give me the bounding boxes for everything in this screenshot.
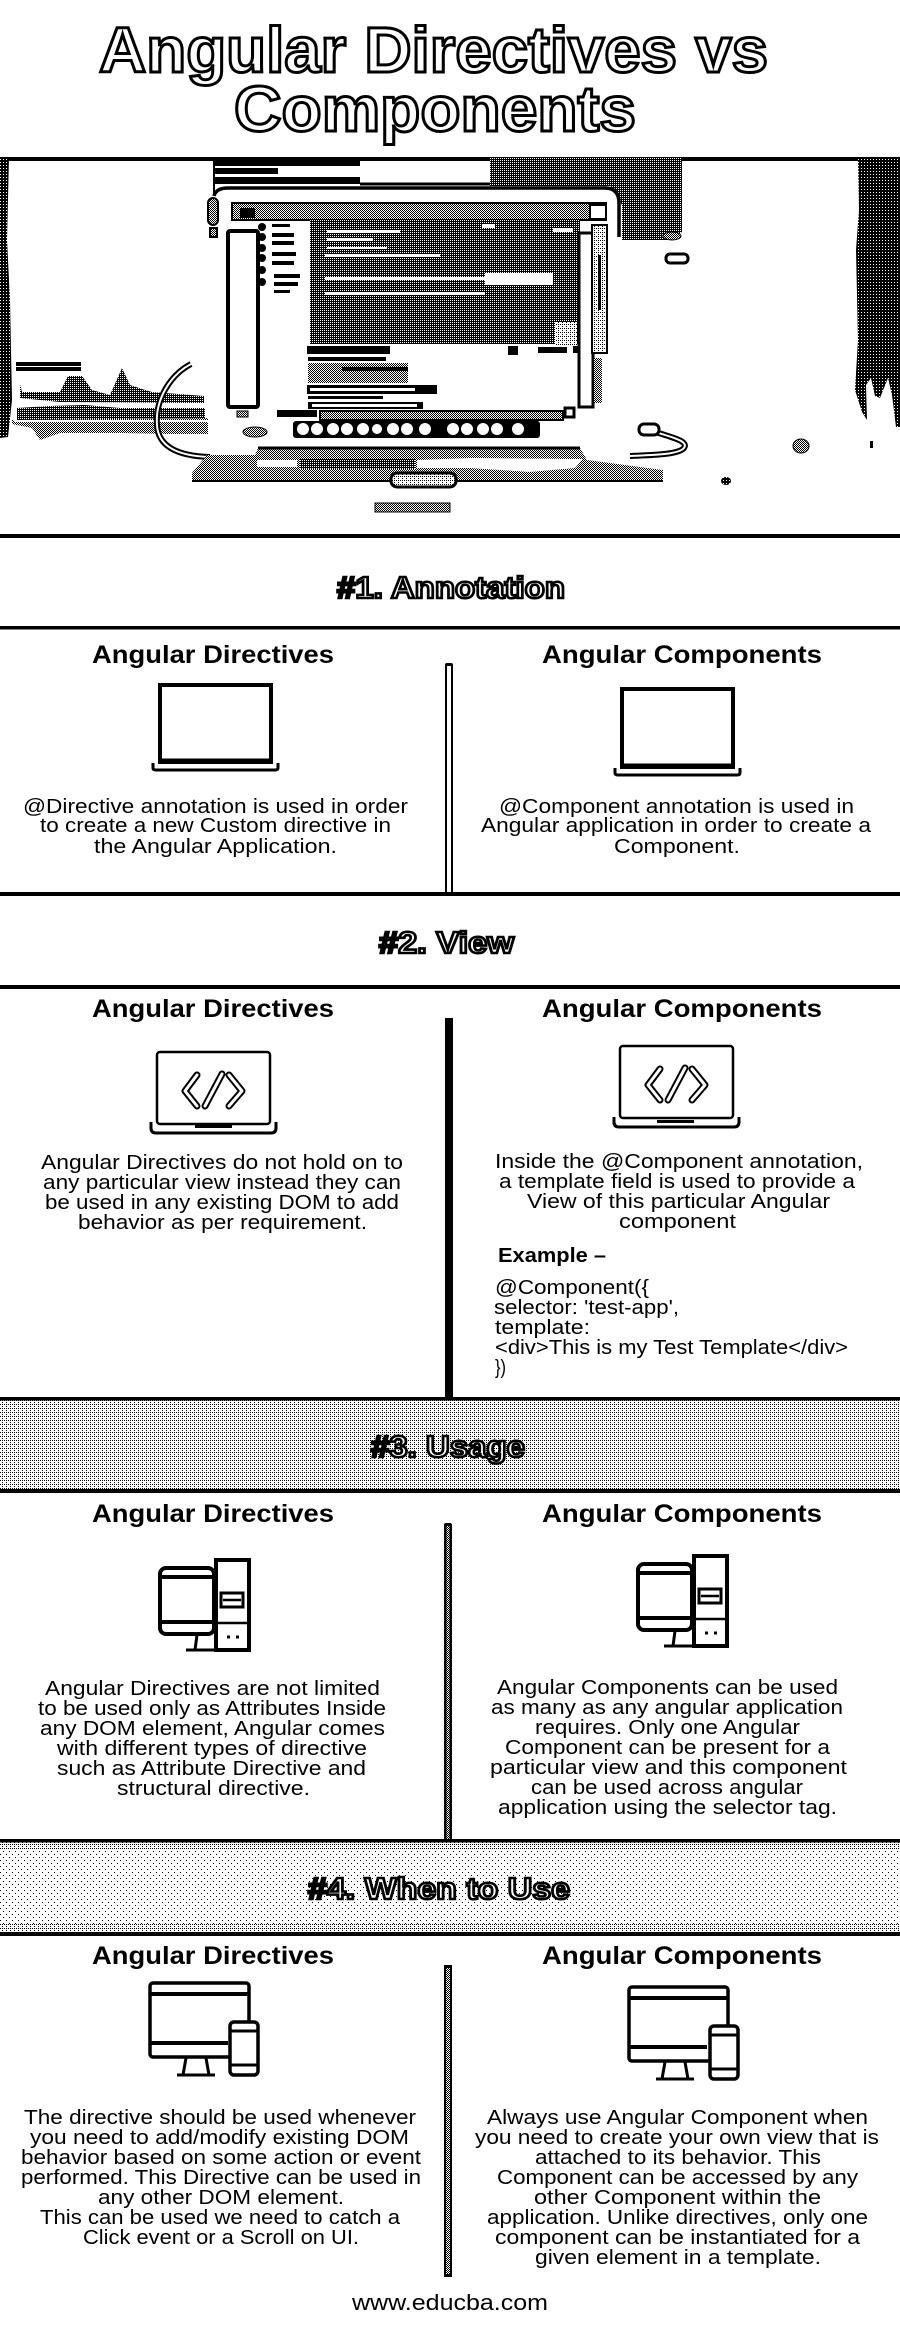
code sample: template:: [495, 1317, 590, 1339]
status bar under the editor: [237, 408, 574, 437]
center divider: [445, 663, 453, 893]
section header: #2 View: #2. View: [379, 925, 515, 960]
icon: blank laptop right: [615, 689, 740, 775]
text: component usage: Component can be present for a: [505, 1737, 831, 1759]
text: component when to use: given element in a template.: [535, 2247, 821, 2269]
panel: annotation comparison: [23, 641, 872, 893]
section header: #4 When to Use: [0, 1839, 900, 1936]
title: Angular Directives vs: [99, 14, 768, 86]
text: directive usage: [38, 1678, 386, 1800]
center divider: [445, 1018, 453, 1397]
menu text strips above the computer: [213, 158, 490, 194]
icon: code laptop left: [151, 1052, 276, 1133]
title: [99, 14, 768, 145]
code sample: }): [495, 1357, 506, 1379]
photo background: right dark strip: [855, 157, 900, 427]
icon: desktop tower left: [160, 1560, 249, 1650]
heading: Angular Components: Angular Components: [542, 995, 822, 1023]
heading: Angular Directives: Angular Directives: [92, 1942, 334, 1970]
text: component view: component: [619, 1211, 737, 1233]
editor file tree: [240, 208, 310, 293]
computer stand and keyboard shadow: [192, 448, 663, 512]
text: directive when to use: [21, 2107, 421, 2249]
text: directive annotation: the Angular Application.: [94, 836, 337, 858]
photo background: top dark block: [490, 157, 682, 240]
text: directive usage: with different types of directive: [56, 1738, 367, 1760]
text: directive when to use: any other DOM element.: [98, 2187, 344, 2209]
text: directive usage: to be used only as Attributes Inside: [38, 1698, 386, 1720]
text: component when to use: application. Unlike directives, only one: [487, 2207, 868, 2229]
text: component when to use: attached to its behavior. This: [535, 2147, 821, 2169]
heading: Angular Directives: Angular Directives: [92, 1500, 334, 1528]
text: directive usage: any DOM element, Angular comes: [40, 1718, 385, 1740]
text: directive view: [41, 1152, 403, 1234]
text: component when to use: [475, 2107, 879, 2269]
section header: #3 Usage: #3. Usage: [371, 1429, 525, 1464]
computer bezel: [214, 188, 619, 237]
panel: when to use comparison: [21, 1942, 879, 2277]
text: component view: Inside the @Component annotation,: [495, 1151, 863, 1173]
text: directive annotation: @Directive annotation is used in order: [23, 796, 408, 818]
heading: Angular Components: Angular Components: [542, 1942, 822, 1970]
text: component annotation: Angular application in order to create a: [481, 815, 872, 837]
text: component usage: application using the selector tag.: [498, 1797, 837, 1819]
editor right panels: [579, 205, 607, 407]
code sample: <div>This is my Test Template</div>: [495, 1337, 848, 1359]
example label: Example –: [498, 1245, 606, 1267]
text: component usage: as many as any angular application: [491, 1697, 843, 1719]
code sample: @Component({: [495, 1277, 649, 1299]
text: directive when to use: performed. This Directive can be used in: [21, 2167, 421, 2189]
center divider: [444, 1523, 452, 1840]
text: component usage: Angular Components can be used: [497, 1677, 838, 1699]
text: directive view: be used in any existing DOM to add: [45, 1192, 399, 1214]
text: directive when to use: Click event or a Scroll on UI.: [83, 2227, 359, 2249]
text: directive usage: structural directive.: [117, 1778, 310, 1800]
text: directive when to use: This can be used we need to catch a: [40, 2207, 401, 2229]
section header: #4 When to Use: #4. When to Use: [308, 1871, 570, 1906]
text: component view: View of this particular Angular: [527, 1191, 830, 1213]
text: directive view: any particular view instead they can: [43, 1172, 401, 1194]
icon: blank laptop left: [153, 685, 278, 770]
photo background: left dark strip: [0, 157, 12, 438]
text: component usage: [490, 1677, 847, 1819]
heading: Angular Components: Angular Components: [542, 1500, 822, 1528]
editor code area: [310, 220, 580, 345]
text: component when to use: component can be instantiated for a: [495, 2227, 861, 2249]
editor left panel: [228, 231, 258, 407]
section header: #2 View: [0, 892, 900, 989]
icon: monitor and phone left: [150, 1983, 258, 2075]
section header: #1 Annotation: [0, 534, 900, 630]
text: component when to use: Component can be accessed by any: [497, 2167, 858, 2189]
text: directive annotation: [23, 796, 408, 858]
code sample: selector: 'test-app',: [494, 1297, 679, 1319]
section header: #1 Annotation: #1. Annotation: [337, 570, 565, 605]
icon: monitor and phone right: [629, 1987, 738, 2079]
title: Components: [234, 73, 636, 145]
text: component annotation: [481, 796, 872, 858]
icon: code laptop right: [614, 1046, 739, 1127]
text: component when to use: you need to create your own view that is: [475, 2127, 879, 2149]
cable on the left: [157, 364, 210, 457]
text: component when to use: Always use Angular Component when: [487, 2107, 868, 2129]
heading: Angular Directives: Angular Directives: [92, 995, 334, 1023]
code sample: [494, 1277, 848, 1379]
application dock: [293, 421, 540, 438]
icon: desktop tower right: [638, 1556, 727, 1646]
text: directive usage: Angular Directives are not limited: [45, 1678, 380, 1700]
editor console panel: [307, 346, 580, 409]
section header: #3 Usage: [0, 1397, 900, 1493]
text: component view: a template field is used to provide a: [499, 1171, 856, 1193]
text: directive view: Angular Directives do not hold on to: [41, 1152, 403, 1174]
hero photo: computer on a desk: [0, 157, 900, 512]
cable and plug on the right: [630, 424, 685, 456]
small desk specks: [721, 439, 873, 485]
text: component usage: particular view and this component: [490, 1757, 847, 1779]
editor toolbar: [232, 203, 606, 220]
text: component annotation: @Component annotation is used in: [499, 796, 854, 818]
text: directive view: behavior as per requirement.: [78, 1212, 367, 1234]
text: directive annotation: to create a new Custom directive in: [40, 815, 391, 837]
desk objects on the left: [12, 362, 209, 440]
panel: usage comparison: [38, 1500, 847, 1840]
text: directive when to use: behavior based on some action or event: [21, 2147, 421, 2169]
panel: view comparison: [41, 995, 863, 1397]
capsule marks near the bezel: [208, 198, 688, 263]
text: component usage: can be used across angular: [531, 1777, 803, 1799]
center divider: [444, 1965, 452, 2277]
text: component when to use: other Component within the: [534, 2187, 821, 2209]
text: component annotation: Component.: [614, 836, 740, 858]
text: component view: [495, 1151, 863, 1233]
text: directive when to use: you need to add/modify existing DOM: [30, 2127, 409, 2149]
text: directive when to use: The directive should be used whenever: [24, 2107, 416, 2129]
text: directive usage: such as Attribute Directive and: [57, 1758, 366, 1780]
heading: Angular Directives: Angular Directives: [92, 641, 334, 669]
footer: website: www.educba.com: [351, 2290, 548, 2315]
heading: Angular Components: Angular Components: [542, 641, 822, 669]
text: component usage: requires. Only one Angular: [535, 1717, 800, 1739]
